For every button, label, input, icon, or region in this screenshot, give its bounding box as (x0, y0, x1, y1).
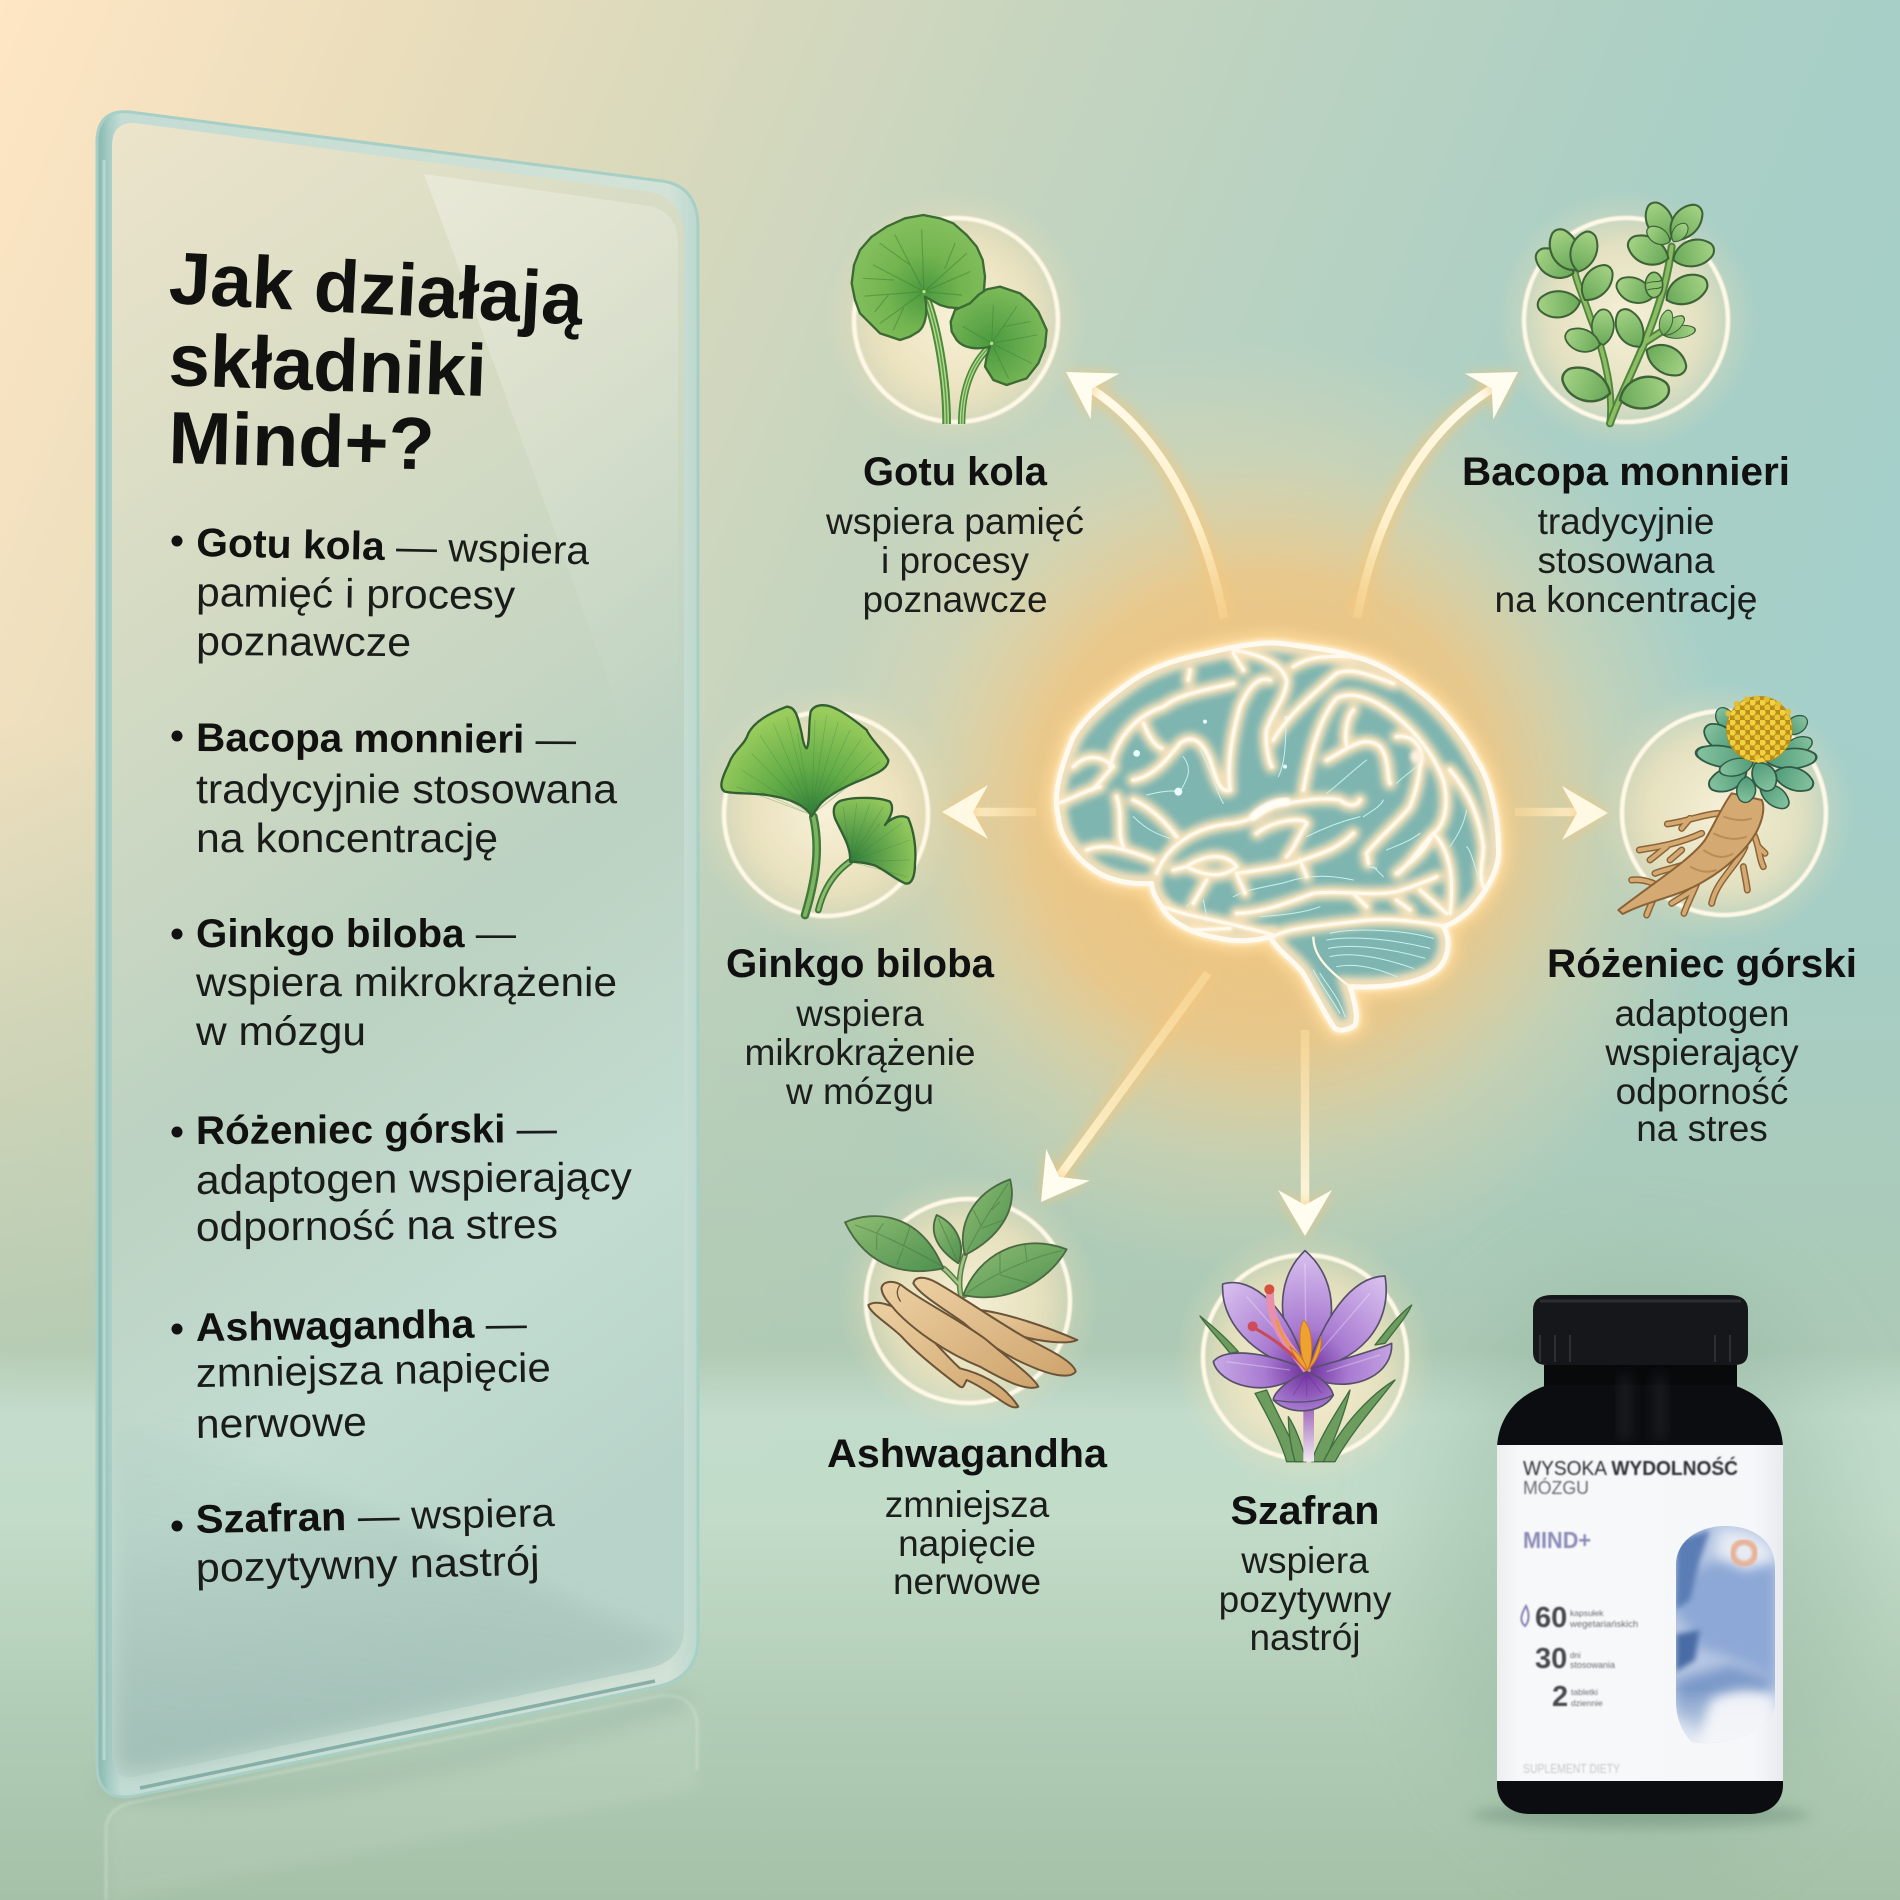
list item: Bacopa monnieri: na koncentrację (196, 815, 498, 861)
icon: ring (1594, 683, 1854, 943)
label: Bacopa monnieri (1462, 450, 1790, 620)
list item: Różeniec górski (172, 1107, 633, 1250)
label text: MIND+ (1523, 1527, 1591, 1553)
label text: 60 (1535, 1602, 1567, 1634)
arrow: to Gotu kola (1052, 349, 1224, 618)
label: Szafran: nastrój (1249, 1617, 1361, 1658)
label: Ginkgo biloba: w mózgu (785, 1071, 934, 1112)
brain: cyan neural lines (1133, 717, 1483, 1017)
icon: ring (1175, 1227, 1435, 1487)
list item: Gotu kola (172, 521, 590, 665)
label: Ginkgo biloba: wspiera (795, 993, 924, 1034)
icon: saffron crocus (1200, 1251, 1412, 1462)
label: Ashwagandha: Ashwagandha (827, 1432, 1108, 1476)
list: ingredients (172, 521, 633, 1591)
ingredient: Różeniec górski (1547, 683, 1857, 1149)
icon: ashwagandha roots and leaves (845, 1179, 1077, 1407)
list item: Ginkgo biloba: wspiera mikrokrążenie (195, 959, 617, 1005)
label: Szafran: Szafran (1230, 1489, 1380, 1533)
title: składniki (167, 318, 488, 412)
bottle body (1497, 1365, 1783, 1814)
list item: Gotu kola: poznawcze (196, 618, 411, 665)
icon: ring (1496, 190, 1756, 450)
list item: Różeniec górski: adaptogen wspierający (196, 1154, 633, 1203)
label: Ashwagandha: nerwowe (893, 1561, 1041, 1602)
list item: Szafran: pozytywny nastrój (195, 1538, 540, 1591)
label: Bacopa monnieri: stosowana (1538, 540, 1715, 581)
label text (1521, 1456, 1738, 1776)
icon: glowing brain (1056, 643, 1499, 1030)
stamens (1248, 1284, 1307, 1370)
label: Różeniec górski: wspierający (1604, 1032, 1799, 1073)
list item: Ginkgo biloba: w mózgu (195, 1008, 366, 1054)
list item: Ashwagandha (172, 1302, 551, 1447)
label: Szafran: pozytywny (1219, 1579, 1392, 1620)
label: Szafran (1219, 1489, 1392, 1658)
label: Bacopa monnieri: Bacopa monnieri (1462, 450, 1790, 494)
list item: Bacopa monnieri: Bacopa monnieri — (196, 716, 576, 762)
icon: ring (696, 684, 956, 944)
label: Ginkgo biloba: Ginkgo biloba (726, 942, 995, 986)
ingredient: Bacopa monnieri (1462, 190, 1790, 620)
label: Gotu kola: wspiera pamięć (825, 501, 1084, 542)
label: Różeniec górski (1547, 942, 1857, 1149)
label text: 30 (1535, 1643, 1567, 1675)
label: Ginkgo biloba (726, 942, 995, 1112)
arrow: to Ginkgo biloba (942, 785, 1036, 839)
label: Ashwagandha: zmniejsza (885, 1484, 1050, 1525)
product: Mind+ bottle (1470, 1295, 1810, 1827)
glass highlight (424, 174, 678, 880)
bottle label (1497, 1445, 1783, 1781)
label: Różeniec górski: odporność (1616, 1071, 1788, 1112)
list item: Ashwagandha: zmniejsza napięcie (195, 1344, 551, 1396)
label text: dni (1570, 1651, 1581, 1660)
label text: kapsułek (1570, 1608, 1604, 1618)
ingredient: Szafran (1175, 1227, 1435, 1658)
list item: Bacopa monnieri (172, 716, 617, 861)
list item: Szafran: Szafran — wspiera (195, 1491, 556, 1542)
list item: Różeniec górski: Różeniec górski — (196, 1107, 557, 1153)
glass inner surface (112, 123, 684, 1777)
label image (1676, 1526, 1775, 1744)
ingredient: Gotu kola (825, 190, 1086, 620)
label: Różeniec górski: Różeniec górski (1547, 942, 1857, 986)
label text: stosowania (1570, 1660, 1615, 1670)
label: Szafran: wspiera (1240, 1540, 1369, 1581)
list item: Różeniec górski: odporność na stres (196, 1201, 558, 1250)
title: Mind+? (168, 396, 436, 485)
ingredient: Ashwagandha (827, 1171, 1108, 1602)
list item: Bacopa monnieri: tradycyjnie stosowana (196, 766, 617, 812)
list item: Ginkgo biloba (172, 912, 617, 1054)
label text: SUPLEMENT DIETY (1523, 1762, 1621, 1776)
label: Różeniec górski: na stres (1636, 1108, 1768, 1149)
label text: WYSOKA WYDOLNOŚĆ (1523, 1456, 1738, 1480)
label text: MÓZGU (1523, 1477, 1589, 1498)
icon: ginkgo leaves (721, 705, 915, 915)
icon: gotu kola leaves (852, 215, 1047, 424)
arrow: to Różeniec górski (1515, 786, 1608, 840)
arrow: to Ashwagandha (1019, 973, 1208, 1218)
label: Gotu kola: i procesy (881, 540, 1030, 581)
brain: folds (1056, 643, 1499, 1030)
list item: Ginkgo biloba: Ginkgo biloba — (196, 912, 516, 956)
glass lower shade (114, 1420, 674, 1773)
label text: 2 (1552, 1681, 1568, 1713)
arrow: to Szafran (1278, 1030, 1332, 1236)
label: Ashwagandha (827, 1432, 1108, 1602)
label: Gotu kola: Gotu kola (863, 450, 1048, 494)
list item: Ashwagandha: nerwowe (195, 1399, 367, 1447)
list item: Gotu kola: Gotu kola — wspiera (196, 521, 590, 573)
arrow: to Bacopa monnieri (1357, 349, 1532, 618)
label: Gotu kola (825, 450, 1084, 620)
title: Jak działają (167, 236, 586, 341)
list item: Gotu kola: pamięć i procesy (196, 569, 516, 618)
label: Różeniec górski: adaptogen (1615, 993, 1789, 1034)
label: Bacopa monnieri: na koncentrację (1494, 579, 1758, 620)
label: Ashwagandha: napięcie (898, 1523, 1036, 1564)
list item: Ashwagandha: Ashwagandha — (196, 1302, 527, 1350)
icon: bacopa sprig (1530, 198, 1717, 423)
title (167, 236, 586, 485)
panel: glass card (97, 112, 698, 1797)
ingredient: Ginkgo biloba (696, 684, 995, 1112)
label: Ginkgo biloba: mikrokrążenie (744, 1032, 976, 1073)
label text: wegetariańskich (1569, 1619, 1638, 1630)
label text: tabletki (1571, 1687, 1598, 1697)
label: Bacopa monnieri: tradycyjnie (1538, 501, 1714, 542)
list item: Szafran (172, 1491, 556, 1591)
icon: ring (838, 1171, 1098, 1431)
glass frame (97, 112, 698, 1797)
bottle cap (1533, 1295, 1748, 1365)
label text: dziennie (1571, 1698, 1603, 1708)
label: Gotu kola: poznawcze (862, 579, 1048, 620)
icon: rhodiola plant (1618, 695, 1817, 915)
icon: ring (826, 190, 1086, 450)
